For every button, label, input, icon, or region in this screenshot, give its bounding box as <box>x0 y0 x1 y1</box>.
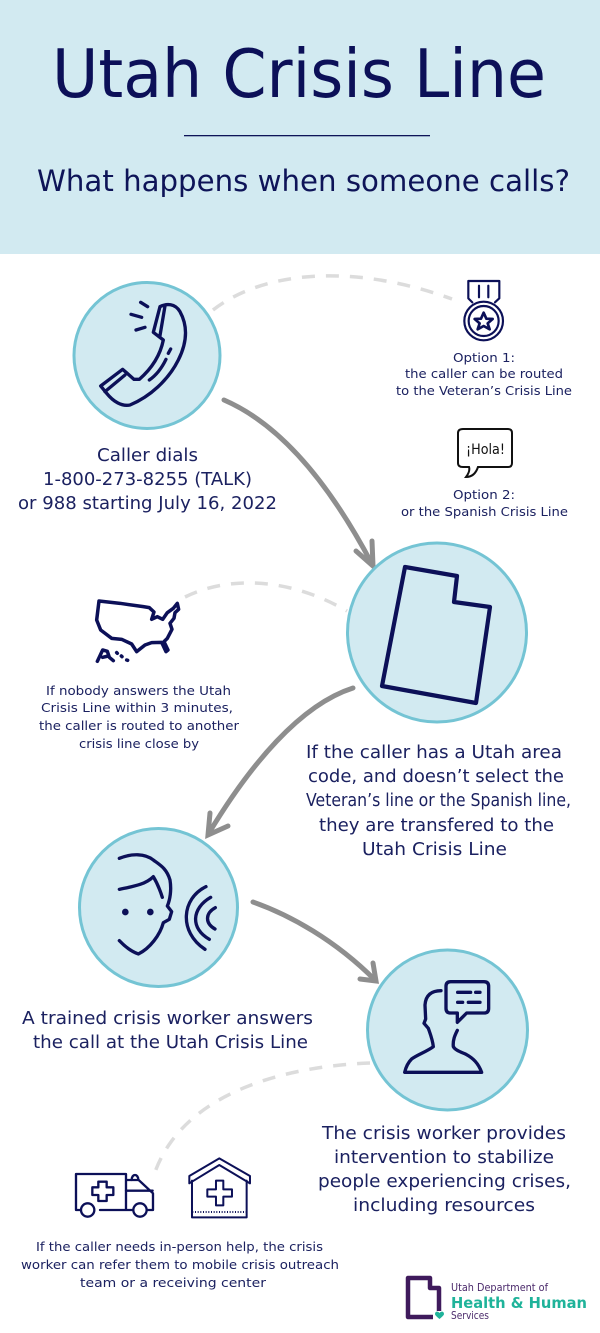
header divider <box>184 135 430 136</box>
text: Utah area code: code, and doesn’t select the <box>308 766 564 787</box>
title: Utah Crisis Line <box>52 35 546 113</box>
text: nobody answers: If nobody answers the Utah <box>46 684 231 699</box>
text: trained worker: A trained crisis worker answers <box>22 1008 313 1029</box>
icon: telephone <box>101 302 185 405</box>
text: option 2: or the Spanish Crisis Line <box>401 505 568 520</box>
text: Utah area code: Veteran’s line or the Spanish line, <box>306 791 571 811</box>
step 4: intervention circle <box>368 950 528 1110</box>
text: Utah area code: Utah Crisis Line <box>362 839 507 860</box>
icon: receiving center <box>189 1158 250 1217</box>
text: intervention <box>318 1123 571 1216</box>
step 2: Utah circle <box>348 543 526 722</box>
icon: Hola speech bubble: ¡Hola! <box>466 442 505 458</box>
arrow: caller to Utah <box>224 400 373 566</box>
text: intervention: people experiencing crises, <box>318 1171 571 1192</box>
text: intervention: including resources <box>353 1195 535 1216</box>
text: option 1 <box>396 351 572 399</box>
text: caller dials <box>18 445 277 514</box>
text: nobody answers: crisis line close by <box>79 737 199 752</box>
icon: Hola speech bubble <box>458 429 512 477</box>
text: in-person help: worker can refer them to mobile crisis outreach <box>21 1258 339 1273</box>
text: option 2: Option 2: <box>453 488 515 503</box>
text: option 1: the caller can be routed <box>405 367 563 382</box>
text: caller dials: or 988 starting July 16, 2022 <box>18 493 277 514</box>
icon: person with speech bubble <box>405 982 489 1072</box>
text: in-person help: team or a receiving center <box>80 1276 267 1291</box>
logo text: Health & Human <box>451 1294 587 1312</box>
text: caller dials: 1-800-273-8255 (TALK) <box>43 469 252 490</box>
step 3: crisis worker circle <box>80 828 238 986</box>
dashed connector: crisis worker to in-person help <box>155 1063 370 1172</box>
arrow: crisis worker to intervention <box>253 902 376 981</box>
text: intervention: The crisis worker provides <box>321 1123 566 1144</box>
text: nobody answers: the caller is routed to another <box>39 719 240 734</box>
text: option 1: to the Veteran’s Crisis Line <box>396 384 572 399</box>
text: trained worker <box>22 1008 313 1053</box>
text: intervention: intervention to stabilize <box>334 1147 554 1168</box>
text: nobody answers: Crisis Line within 3 minutes, <box>41 701 233 716</box>
text: option 2 <box>401 488 568 520</box>
text: in-person help: If the caller needs in-person help, the crisis <box>36 1240 323 1255</box>
text: Utah area code: If the caller has a Utah area <box>306 742 562 763</box>
logo icon: Utah shape with heart <box>408 1278 444 1319</box>
icon: USA map <box>97 601 179 661</box>
header panel <box>0 0 600 254</box>
arrow: Utah to crisis worker <box>208 688 353 835</box>
text: option 1: Option 1: <box>453 351 515 366</box>
logo: Utah Department of Health and Human Services <box>408 1278 587 1322</box>
text: in-person help <box>21 1240 339 1291</box>
dashed connector: USA map to Utah <box>185 583 347 611</box>
text: nobody answers <box>39 684 240 752</box>
dashed connector: phone to options <box>213 276 452 310</box>
icon: veteran medal <box>464 281 503 340</box>
text: Utah area code: they are transfered to the <box>319 815 554 836</box>
icon: listening face <box>119 855 215 954</box>
text: Utah area code <box>306 742 571 860</box>
icon: ambulance <box>76 1174 153 1217</box>
logo text: Services <box>451 1309 489 1322</box>
logo text <box>451 1281 587 1322</box>
icon: Utah outline <box>382 567 490 703</box>
text: trained worker: the call at the Utah Crisis Line <box>33 1032 308 1053</box>
logo text: Utah Department of <box>451 1281 549 1294</box>
step 1: phone circle <box>74 282 220 428</box>
text: caller dials: Caller dials <box>97 445 198 466</box>
subtitle: What happens when someone calls? <box>37 164 570 198</box>
